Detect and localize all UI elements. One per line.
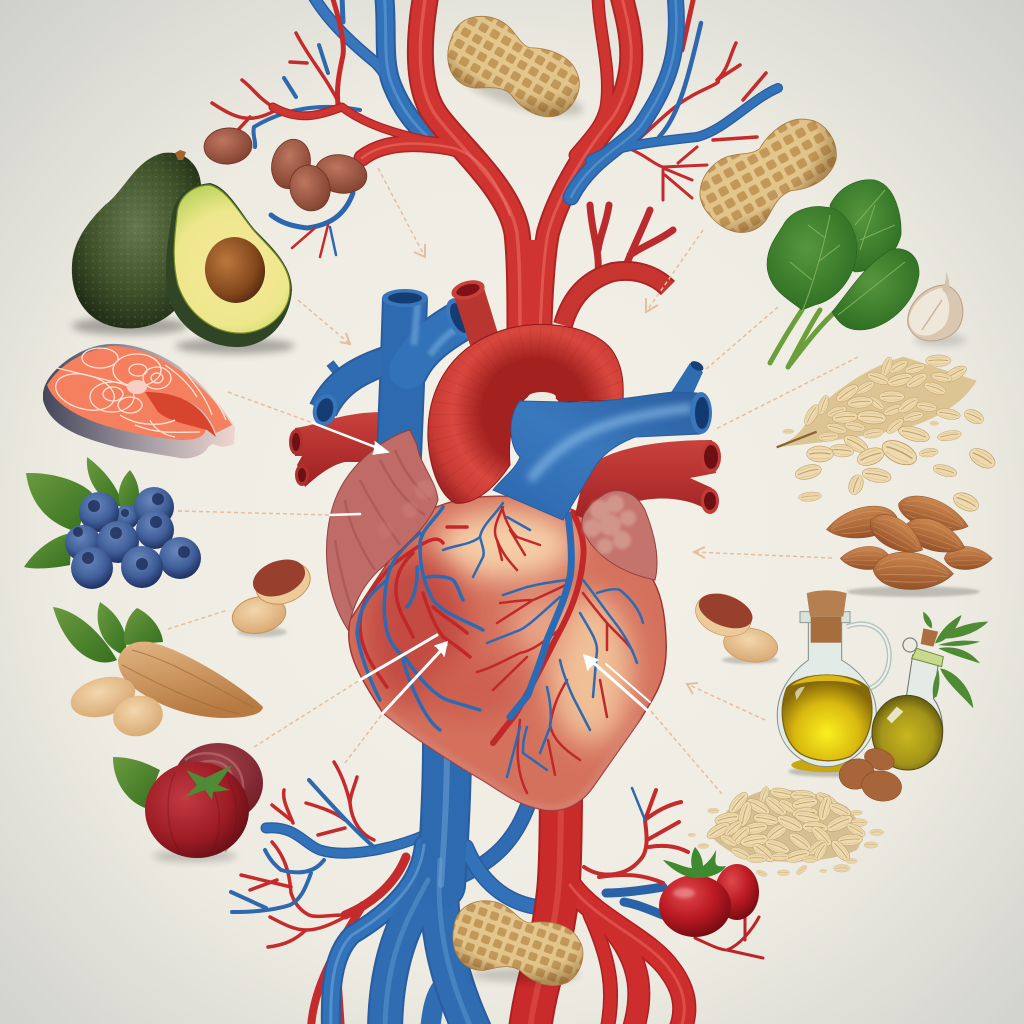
food: peanut bottom [446, 895, 590, 991]
food: tomatoes bottom right [659, 847, 759, 937]
whole avocado [72, 150, 201, 328]
right red branches [420, 0, 766, 340]
left pulmonary stubs [289, 412, 385, 487]
heart main body [349, 496, 666, 810]
left red branches [212, 0, 520, 340]
small branching artery on the aortic arch [563, 205, 673, 325]
right blue branches [571, 0, 778, 197]
leader arrows [168, 168, 858, 794]
lower red vessels [530, 788, 763, 1024]
food: oat pile [688, 785, 884, 878]
right atrium [582, 491, 657, 580]
aortic arch [428, 324, 623, 503]
food: almonds right [824, 489, 992, 597]
highlight arrows [313, 423, 650, 713]
berries [65, 487, 201, 589]
food: blueberries [24, 457, 201, 589]
small bottle [872, 612, 988, 770]
food: spinach [767, 180, 919, 367]
coronary veins blue [357, 503, 643, 777]
avocado half [166, 183, 292, 347]
top vessels [212, 0, 778, 340]
food: oats [777, 355, 998, 515]
pulmonary trunk [493, 359, 712, 520]
right pulmonary stubs [575, 440, 721, 525]
left blue branches [253, 0, 428, 257]
food: seeds top left [203, 126, 370, 215]
coronary vessels [357, 503, 643, 793]
food: garlic [908, 272, 966, 346]
food: nut right [690, 586, 780, 666]
coronary arteries red [360, 507, 632, 793]
hazelnuts [836, 745, 904, 804]
aortic top stub [449, 277, 500, 345]
food: tomato left [113, 743, 263, 862]
food: peanut top [437, 6, 592, 126]
lower blue vessels [231, 745, 545, 1024]
left atrium [326, 430, 438, 630]
food: olive oil bottles [777, 590, 988, 804]
lower lateral red left [241, 762, 406, 1024]
large bottle [777, 590, 889, 772]
food: peanut upper right [687, 98, 849, 247]
food: nut left [229, 553, 316, 638]
food: almond with leaves [53, 602, 263, 741]
leaves [24, 457, 139, 568]
food: avocado [72, 150, 295, 354]
heart [289, 277, 721, 810]
vena cava [309, 289, 480, 480]
lower vessels [231, 745, 763, 1024]
food: salmon steak [43, 344, 235, 458]
